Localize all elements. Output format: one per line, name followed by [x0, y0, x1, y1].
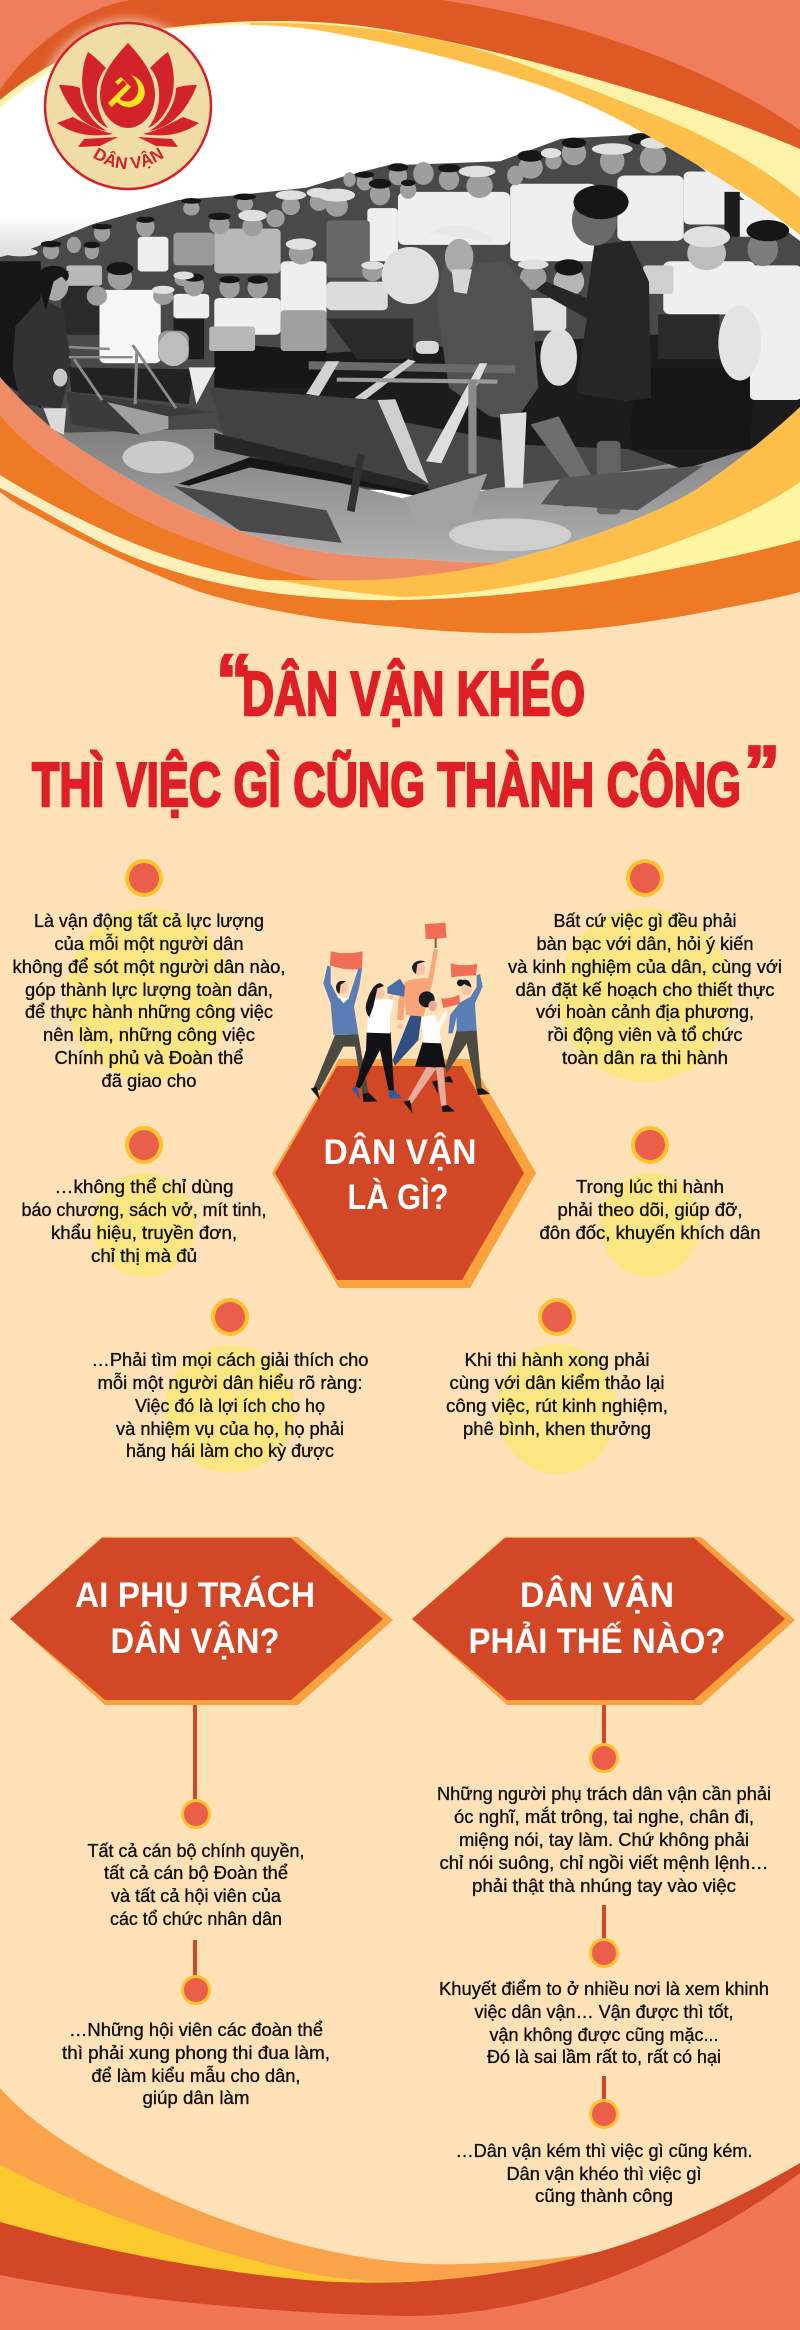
- heads of the crowd: [3, 133, 789, 306]
- header swoosh bands: [0, 0, 800, 633]
- hexagon: Dân vận phải thế nào: DÂN VẬN: [520, 1575, 674, 1615]
- item: what is dan van 2: [508, 859, 782, 1082]
- item: big shortcoming: vận không được cũng mặc...: [490, 2024, 718, 2045]
- item: what is dan van 1: Là vận động tất cả lực lượng: [34, 910, 264, 931]
- item: all officials: [88, 1705, 304, 1929]
- item: during execution: đôn đốc, khuyến khích dân: [540, 1222, 760, 1243]
- item: newspapers alone are not enough: báo chương, sách vở, mít tinh,: [22, 1199, 266, 1220]
- item: big shortcoming: Đó là sai lầm rất to, rất có hại: [487, 2046, 721, 2067]
- person: blue sweater left: [311, 966, 377, 1102]
- item: what is dan van 2: và kinh nghiệm của dân, cùng với: [508, 956, 782, 977]
- item: what is dan van 1: [12, 859, 286, 1091]
- Uncle Ho figure: [442, 278, 538, 418]
- young farmer: [536, 241, 651, 404]
- item: explain to every citizen: Việc đó là lợi ích cho họ: [135, 1395, 325, 1416]
- water highlights: [122, 441, 194, 474]
- item: those in charge must act: chỉ nói suông, chỉ ngồi viết mệnh lệnh…: [440, 1852, 768, 1873]
- item: what is dan van 1: nên làm, những công việc: [43, 1024, 255, 1045]
- item: what is dan van 2: bàn bạc với dân, hỏi ý kiến: [536, 933, 754, 954]
- item: after execution: cùng với dân kiểm thảo lại: [450, 1372, 664, 1393]
- rice seedlings: [173, 486, 342, 543]
- title: ”: [744, 732, 780, 812]
- title: “: [216, 641, 252, 721]
- item: those in charge must act: Những người phụ trách dân vận cần phải: [437, 1783, 771, 1804]
- item: what is dan van 1: Chính phủ và Đoàn thể: [54, 1047, 244, 1068]
- hexagon: Dân vận là gì: DÂN VẬN: [324, 1132, 476, 1172]
- item: those in charge must act: [437, 1705, 771, 1896]
- item: those in charge must act: phải thật thà nhúng tay vào việc: [472, 1875, 736, 1896]
- person: white top black trousers: [351, 979, 405, 1099]
- item: what is dan van 2: với hoàn cảnh địa phương,: [536, 1001, 754, 1022]
- logo label: DÂN VẬN: [93, 148, 164, 170]
- item: members lead by example: [62, 1940, 330, 2108]
- item: during execution: phải theo dõi, giúp đỡ,: [558, 1199, 742, 1220]
- item: conclusion: [456, 2076, 752, 2206]
- item: newspapers alone are not enough: chỉ thị mà đủ: [91, 1245, 197, 1266]
- hexagon: Ai phụ trách dân vận: [10, 1537, 393, 1705]
- item: newspapers alone are not enough: [22, 1126, 266, 1277]
- item: all officials: Tất cả cán bộ chính quyền,: [88, 1840, 304, 1861]
- hexagon: Ai phụ trách dân vận: AI PHỤ TRÁCH: [75, 1575, 315, 1615]
- item: newspapers alone are not enough: khẩu hiệu, truyền đơn,: [51, 1222, 237, 1243]
- item: during execution: [540, 1126, 760, 1277]
- title: [32, 641, 780, 820]
- item: explain to every citizen: …Phải tìm mọi cách giải thích cho: [92, 1349, 368, 1370]
- item: what is dan van 2: toàn dân ra thi hành: [562, 1047, 728, 1068]
- item: explain to every citizen: mỗi một người dân hiểu rõ ràng:: [98, 1372, 362, 1393]
- hexagon: Dân vận phải thế nào: PHẢI THẾ NÀO?: [468, 1621, 726, 1661]
- item: conclusion: cũng thành công: [535, 2185, 673, 2206]
- front seeding machine: [309, 361, 515, 374]
- item: what is dan van 1: để thực hành những công việc: [25, 1001, 273, 1022]
- item: after execution: Khi thi hành xong phải: [464, 1349, 650, 1370]
- illustration: activists with flags and megaphone: [311, 923, 490, 1113]
- item: what is dan van 2: dân đặt kế hoạch cho thiết thực: [516, 979, 774, 1000]
- left woman: [13, 298, 71, 408]
- item: what is dan van 1: góp thành lực lượng toàn dân,: [25, 979, 273, 1000]
- item: big shortcoming: việc dân vận… Vận được thì tốt,: [474, 2001, 734, 2022]
- item: members lead by example: thì phải xung phong thi đua làm,: [62, 2042, 330, 2063]
- item: big shortcoming: Khuyết điểm to ở nhiều nơi là xem khinh: [439, 1978, 769, 1999]
- bottom wave bands: [0, 2088, 800, 2330]
- person: skirt front: [403, 991, 455, 1113]
- hexagon: Ai phụ trách dân vận: DÂN VẬN?: [110, 1621, 280, 1661]
- dark left edge: [0, 261, 41, 408]
- item: all officials: các tổ chức nhân dân: [110, 1908, 282, 1929]
- item: what is dan van 1: của mỗi một người dân: [54, 933, 244, 954]
- item: conclusion: …Dân vận kém thì việc gì cũng kém.: [456, 2140, 752, 2161]
- item: what is dan van 1: đã giao cho: [102, 1070, 196, 1091]
- item: all officials: tất cả cán bộ Đoàn thể: [104, 1862, 288, 1883]
- flags: [330, 923, 477, 1008]
- item: explain to every citizen: và nhiệm vụ của họ, họ phải: [116, 1418, 344, 1439]
- item: after execution: công việc, rút kinh nghiệm,: [446, 1395, 668, 1416]
- hexagon: Dân vận là gì: LÀ GÌ?: [348, 1177, 448, 1217]
- item: after execution: phê bình, khen thưởng: [463, 1418, 651, 1439]
- seated hats and white cone hats: [158, 332, 189, 366]
- item: all officials: và tất cả hội viên của: [111, 1885, 282, 1906]
- item: members lead by example: để làm kiểu mẫu cho dân,: [92, 2065, 300, 2086]
- hexagon: Dân vận phải thế nào: [412, 1537, 795, 1705]
- item: what is dan van 2: Bất cứ việc gì đều phải: [554, 910, 736, 931]
- item: explain to every citizen: [92, 1298, 368, 1473]
- dark soil bank: [214, 327, 800, 469]
- water: [54, 428, 750, 562]
- logo: Dân Vận lotus emblem: [40, 12, 212, 190]
- header photo: farmers and seeding machine in rice field: [0, 25, 800, 562]
- item: during execution: Trong lúc thi hành: [576, 1176, 724, 1197]
- item: after execution: [446, 1298, 668, 1474]
- shirts: [99, 171, 800, 400]
- item: what is dan van 1: không để sót một người dân nào,: [12, 956, 286, 977]
- person: blue right with bun: [432, 974, 490, 1095]
- item: members lead by example: giúp dân làm: [142, 2087, 250, 2108]
- person: jumping orange: [393, 948, 438, 1066]
- item: those in charge must act: óc nghĩ, mắt trông, tai nghe, chân đi,: [454, 1806, 754, 1827]
- title: DÂN VẬN KHÉO: [242, 660, 585, 729]
- item: conclusion: Dân vận khéo thì việc gì: [506, 2163, 702, 2184]
- hexagon: Dân vận là gì: [272, 1059, 536, 1288]
- icon: hammer and sickle: [108, 75, 145, 107]
- item: explain to every citizen: hăng hái làm cho kỳ được: [126, 1440, 334, 1461]
- item: newspapers alone are not enough: …không thể chỉ dùng: [54, 1176, 234, 1197]
- background seeding machine: [66, 392, 214, 435]
- item: big shortcoming: [439, 1905, 769, 2067]
- item: what is dan van 2: rồi động viên và tổ chức: [548, 1024, 742, 1045]
- item: those in charge must act: miệng nói, tay làm. Chứ không phải: [459, 1829, 749, 1850]
- crowd silhouette: [0, 135, 800, 490]
- item: members lead by example: …Những hội viên các đoàn thể: [69, 2019, 323, 2040]
